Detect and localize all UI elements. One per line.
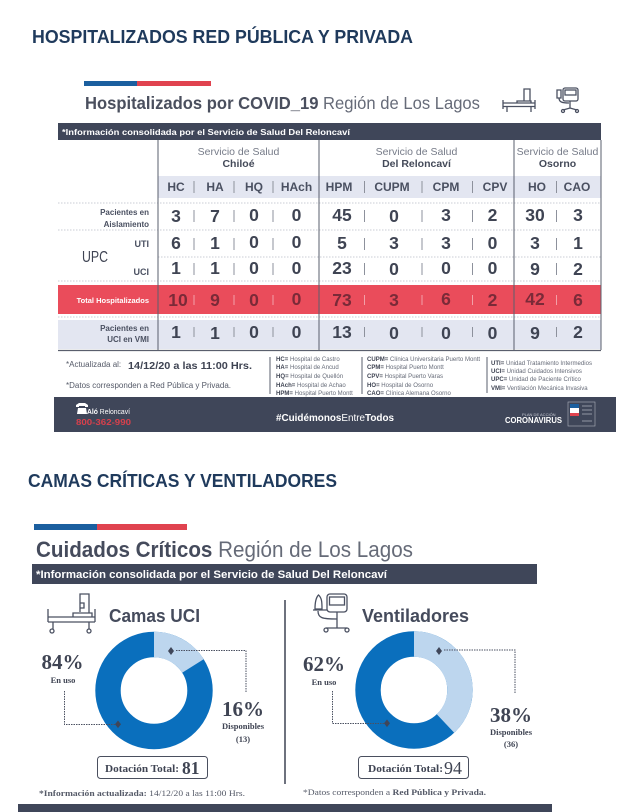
donut chart: 84 en uso, 16 disponibles	[108, 644, 200, 736]
service header: Chiloé: Servicio de Salud	[198, 146, 280, 158]
phone line: 800-362-990	[76, 417, 131, 427]
total box: 81: 81	[182, 758, 200, 778]
row values: UCI en VMI: 0	[488, 323, 498, 343]
row band: UCI en VMI	[58, 320, 601, 349]
row values: UTI: 3	[441, 233, 451, 253]
callout: en uso 62%: En uso	[312, 677, 336, 687]
legend: units: UTI= Unidad Tratamiento Intermedios	[491, 361, 592, 367]
row values: total hospitalizados: 0	[249, 290, 259, 310]
service header: Osorno: Osorno	[539, 158, 576, 170]
row label: pacientes en UCI en VMI	[100, 324, 149, 344]
row labels: UPC: UCI	[134, 267, 149, 277]
info bar	[58, 123, 601, 140]
icon: ventilator	[557, 88, 578, 112]
legend: hospitals 1	[270, 357, 353, 397]
legend: hospitals 1: HPM= Hospital Puerto Montt	[276, 391, 353, 397]
callout: en uso 84%	[42, 650, 121, 728]
total box: 94: 94	[444, 758, 462, 778]
panel: cuidados críticos	[18, 524, 552, 812]
icon: hospital bed	[48, 594, 95, 633]
row values: total hospitalizados: 73	[332, 290, 352, 310]
service header: Del Reloncaví	[376, 146, 458, 170]
row label: pacientes en UCI en VMI: Pacientes en	[100, 324, 149, 333]
hospital codes: HO	[528, 180, 546, 194]
legend: units: VMI= Ventilación Mecánica Invasiva	[491, 386, 588, 392]
callout: disponibles 16%: (13)	[236, 734, 250, 744]
heading: hospitalizados red pública y privada: HOSPITALIZADOS RED PÚBLICA Y PRIVADA	[32, 26, 413, 47]
row values: total hospitalizados: 10	[168, 290, 188, 310]
coronavirus logo: CORONAVIRUS	[505, 415, 562, 425]
row labels: UPC: UPC	[82, 249, 108, 266]
row values: UTI: 1	[573, 233, 583, 253]
panel: ventiladores	[303, 594, 533, 797]
row values: UCI: 0	[488, 258, 498, 278]
service header: Osorno: Servicio de Salud	[517, 146, 599, 158]
row values: UCI en VMI: 0	[389, 323, 399, 343]
row values: UCI en VMI: 13	[332, 322, 352, 342]
hospital codes: CPV	[483, 180, 507, 194]
service header: Osorno	[517, 146, 599, 170]
row values: total hospitalizados: 6	[441, 289, 451, 309]
hospital code header band	[158, 176, 601, 198]
total box: 94	[358, 756, 468, 778]
row label: pacientes en aislamiento: Pacientes en	[100, 208, 149, 217]
data note: *Datos corresponden a Red Pública y Privada.	[303, 788, 486, 797]
legend: hospitals 1: HAch= Hospital de Achao	[276, 383, 346, 389]
heading: ventiladores: Ventiladores	[362, 606, 469, 626]
row values: aislamiento: 0	[389, 206, 399, 226]
hashtag: #CuidémonosEntreTodos	[276, 413, 394, 424]
callout: disponibles 38%: (36)	[504, 739, 518, 749]
legend: hospitals 2	[362, 357, 480, 397]
row values: total hospitalizados: 0	[292, 289, 302, 309]
row values: total hospitalizados	[168, 289, 583, 310]
service header: Chiloé: Chiloé	[222, 158, 255, 170]
service header: Del Reloncaví: Del Reloncaví	[382, 158, 452, 170]
column divider	[284, 600, 286, 784]
row label: pacientes en aislamiento: Aislamiento	[104, 220, 149, 229]
hospital codes: HPM	[326, 180, 352, 194]
update note	[66, 360, 252, 390]
government shield	[568, 402, 595, 426]
row values: UTI: 0	[249, 232, 259, 252]
row values: aislamiento: 7	[210, 206, 220, 226]
row values: UTI: 6	[171, 233, 181, 253]
row values: aislamiento	[171, 205, 583, 226]
row values: UTI	[171, 232, 583, 253]
update note: *Actualizada al:	[66, 360, 121, 369]
row values: UCI: 0	[441, 258, 451, 278]
row values: UCI: 0	[292, 258, 302, 278]
dotted row separators	[58, 203, 601, 317]
row labels: UPC	[82, 239, 149, 277]
callout: disponibles 16%	[168, 647, 265, 744]
icon: hospital bed	[503, 89, 535, 112]
info bar: *Información consolidada por el Servicio de Salud Del Reloncaví	[62, 127, 351, 137]
row values: UCI	[171, 258, 583, 279]
row values: aislamiento: 0	[249, 205, 259, 225]
callout: en uso 62%	[303, 652, 390, 727]
callout: en uso 62%: 62%	[303, 652, 345, 676]
phone line: Aló Reloncaví	[87, 409, 130, 416]
callout: disponibles 16%: Disponibles	[222, 721, 265, 731]
service header: Del Reloncaví: Servicio de Salud	[376, 146, 458, 158]
row values: UTI: 5	[337, 233, 347, 253]
legend: hospitals 1: HC= Hospital de Castro	[276, 357, 340, 363]
update note: *Información actualizada: 14/12/20 a las 11:00 Hrs.	[39, 789, 245, 798]
row values: aislamiento: 2	[488, 205, 498, 225]
total box: 81	[98, 756, 208, 778]
row values: UCI: 2	[573, 259, 583, 279]
legend: hospitals 1: HQ= Hospital de Quellón	[276, 374, 343, 380]
legend: units: UPC= Unidad de Paciente Crítico	[491, 377, 582, 383]
hospital codes: HA	[206, 180, 224, 194]
row values: UCI en VMI: 0	[441, 323, 451, 343]
heading: camas UCI: Camas UCI	[109, 606, 200, 626]
row values: total hospitalizados: 6	[573, 290, 583, 310]
row values: total hospitalizados: 9	[210, 290, 220, 310]
panel: hospitalizados table infographic	[54, 81, 616, 432]
icon: ventilator	[313, 594, 349, 632]
row values: UTI: 3	[530, 233, 540, 253]
row values: UCI en VMI: 2	[573, 322, 583, 342]
row values: UCI: 1	[210, 258, 220, 278]
row values: UTI: 0	[488, 233, 498, 253]
heading: camas críticas y ventiladores: CAMAS CRÍTICAS Y VENTILADORES	[28, 470, 337, 491]
total box: 94: Dotación Total:	[368, 764, 443, 775]
legend: hospitals 2: CPV= Hospital Puerto Varas	[367, 374, 443, 380]
row values: aislamiento: 3	[441, 205, 451, 225]
legend: hospitals 1: HA= Hospital de Ancud	[276, 365, 339, 371]
coronavirus logo: PLAN DE ACCIÓN	[522, 412, 556, 417]
panel title: Hospitalizados por COVID_19 Región de Los Lagos	[85, 93, 480, 113]
row values: total hospitalizados: 3	[389, 290, 399, 310]
row label: pacientes en UCI en VMI: UCI en VMI	[107, 335, 149, 344]
service header: Chiloé	[198, 146, 280, 170]
row values: UCI en VMI	[171, 322, 583, 343]
update note: 14/12/20 a las 11:00 Hrs.	[128, 360, 252, 372]
row values: UTI: 0	[292, 232, 302, 252]
legend: units: UCI= Unidad Cuidados Intensivos	[491, 369, 582, 375]
row values: UCI: 0	[389, 259, 399, 279]
donut chart: 62 en uso, 38 disponibles	[368, 644, 460, 736]
row values: UCI: 9	[530, 259, 540, 279]
info bar	[32, 564, 537, 584]
row values: total hospitalizados: 42	[525, 289, 545, 309]
callout: en uso 84%: En uso	[51, 675, 75, 685]
info bar: *Información consolidada por el Servicio de Salud Del Reloncaví	[36, 569, 388, 581]
legend: hospitals 2: HO= Hospital de Osorno	[367, 383, 434, 389]
row band: total hospitalizados	[58, 285, 601, 314]
row values: UTI: 1	[210, 233, 220, 253]
row values: aislamiento: 45	[332, 205, 352, 225]
row values: aislamiento: 3	[573, 205, 583, 225]
hospital codes: CUPM	[374, 180, 410, 194]
legend: hospitals 2: CPM= Hospital Puerto Montt	[367, 365, 444, 371]
bottom band	[18, 804, 552, 812]
row label: pacientes en aislamiento	[100, 208, 149, 229]
update note: *Datos corresponden a Red Pública y Privada.	[66, 381, 231, 390]
row values: UCI en VMI: 0	[249, 322, 259, 342]
callout: disponibles 16%: 16%	[222, 697, 264, 721]
phone line	[76, 403, 131, 427]
hospital codes: HAch	[281, 180, 312, 194]
table column lines	[58, 140, 601, 350]
callout: disponibles 38%: 38%	[490, 703, 532, 727]
hospital codes: CPM	[433, 180, 459, 194]
hospital codes: CAO	[564, 180, 590, 194]
panel: camas UCI	[39, 594, 265, 798]
row values: UCI: 0	[249, 258, 259, 278]
row values: UCI: 23	[332, 258, 352, 278]
callout: en uso 84%: 84%	[42, 650, 84, 674]
row values: UCI en VMI: 1	[210, 323, 220, 343]
legend: hospitals 2: CAO= Clínica Alemana Osorno	[367, 391, 451, 397]
row labels: UPC: UTI	[134, 239, 149, 249]
row values: aislamiento: 30	[525, 205, 545, 225]
legend: hospitals 2: CUPM= Clínica Universitaria Puerto Montt	[367, 357, 480, 363]
hospital codes: HQ	[245, 180, 263, 194]
column tick separators	[194, 181, 556, 337]
row label: total hospitalizados: Total Hospitalizados	[77, 296, 149, 305]
hospital codes: HC	[167, 180, 185, 194]
row values: aislamiento: 3	[171, 206, 181, 226]
row values: UCI: 1	[171, 258, 181, 278]
row values: UTI: 3	[389, 233, 399, 253]
footer band	[54, 397, 616, 432]
row values: UCI en VMI: 0	[292, 322, 302, 342]
flag stripe	[34, 524, 187, 530]
legend: units	[487, 357, 592, 393]
row values: total hospitalizados: 2	[488, 290, 498, 310]
callout: disponibles 38%: Disponibles	[490, 727, 533, 737]
flag stripe	[84, 81, 211, 86]
hospital codes	[167, 180, 590, 194]
callout: disponibles 38%	[436, 647, 533, 749]
row values: aislamiento: 0	[292, 205, 302, 225]
total box: 81: Dotación Total:	[105, 764, 179, 775]
panel title: Cuidados Críticos Región de Los Lagos	[36, 537, 413, 562]
row values: UCI en VMI: 9	[530, 323, 540, 343]
row values: UCI en VMI: 1	[171, 322, 181, 342]
